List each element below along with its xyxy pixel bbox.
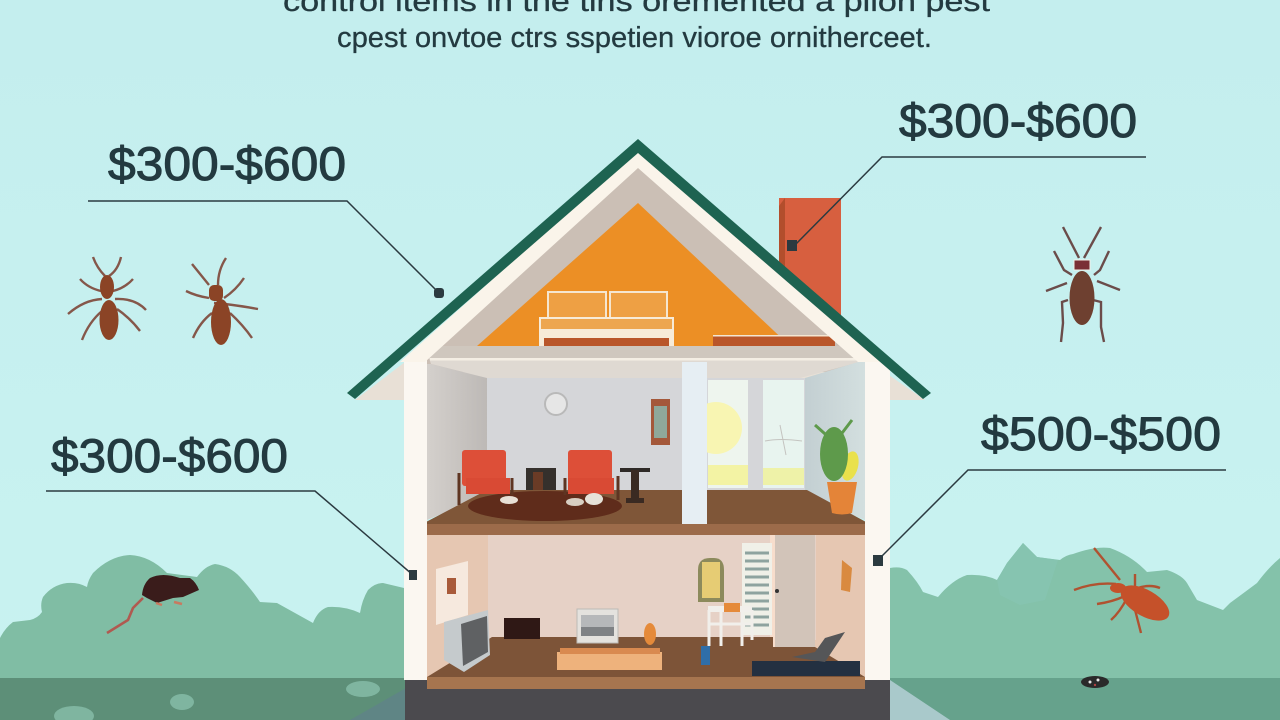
wall figure [841,560,852,592]
lower walls [426,535,866,680]
upper right wall [805,360,865,520]
wall picture [651,399,670,445]
attic shelf [713,335,835,346]
plant [815,420,862,514]
wall cabinet [698,558,724,602]
pest: ant right [186,258,258,345]
window right [763,380,804,488]
pest: ant left [68,257,146,340]
callout: top right price [787,94,1146,251]
callout: top left price [88,137,444,298]
white wall panel [436,561,468,625]
attic orange triangle [477,203,790,346]
intro text [283,0,990,54]
roof interior [420,160,865,372]
pest: red beetle [1074,548,1175,633]
eaves [355,362,925,400]
callout: lower left price [46,429,417,580]
wall clock [545,393,567,415]
door [770,535,815,648]
dark box [504,618,540,639]
items on rug [500,493,603,506]
blue bucket [701,646,710,665]
ladder [742,543,772,635]
side table [526,468,556,490]
armchair left [459,450,512,505]
pest: rat [107,575,199,633]
right wall post [865,360,890,680]
intro text: cpest onvtoe ctrs sspetien vioroe ornitherceet. [337,22,932,54]
roof trim [400,150,887,362]
upper floor edge [426,524,866,535]
pest: small dark bug [1081,676,1109,688]
upper back wall [487,378,807,493]
armchair right [565,450,618,500]
white table [708,603,752,646]
round table [620,468,650,503]
lower floor edge [427,677,865,689]
callout: lower right price: $500-$500 [981,407,1221,460]
callout: top left price: $300-$600 [108,137,346,190]
foundation [405,680,890,720]
right hills and ground [890,543,1280,720]
upper floor [426,490,866,526]
house [347,139,931,720]
roof green [347,139,931,399]
upper left wall [427,364,487,520]
dark floor mat [752,632,860,676]
lower floor [427,637,865,677]
orange toy [644,623,656,645]
callout: top right price: $300-$600 [899,94,1137,147]
window left [690,380,748,488]
heater [577,609,618,643]
callout: lower right price [873,407,1226,566]
attic sofa [539,292,674,347]
callout: lower left price: $300-$600 [51,429,288,482]
air conditioner [444,610,490,672]
column [682,362,707,524]
rug [468,491,622,521]
orange mat [557,648,662,670]
left wall post [404,360,427,680]
chimney [779,198,841,323]
attic floor beam [425,346,858,358]
pest: cockroach [1046,227,1120,342]
left hills and ground [0,555,406,720]
